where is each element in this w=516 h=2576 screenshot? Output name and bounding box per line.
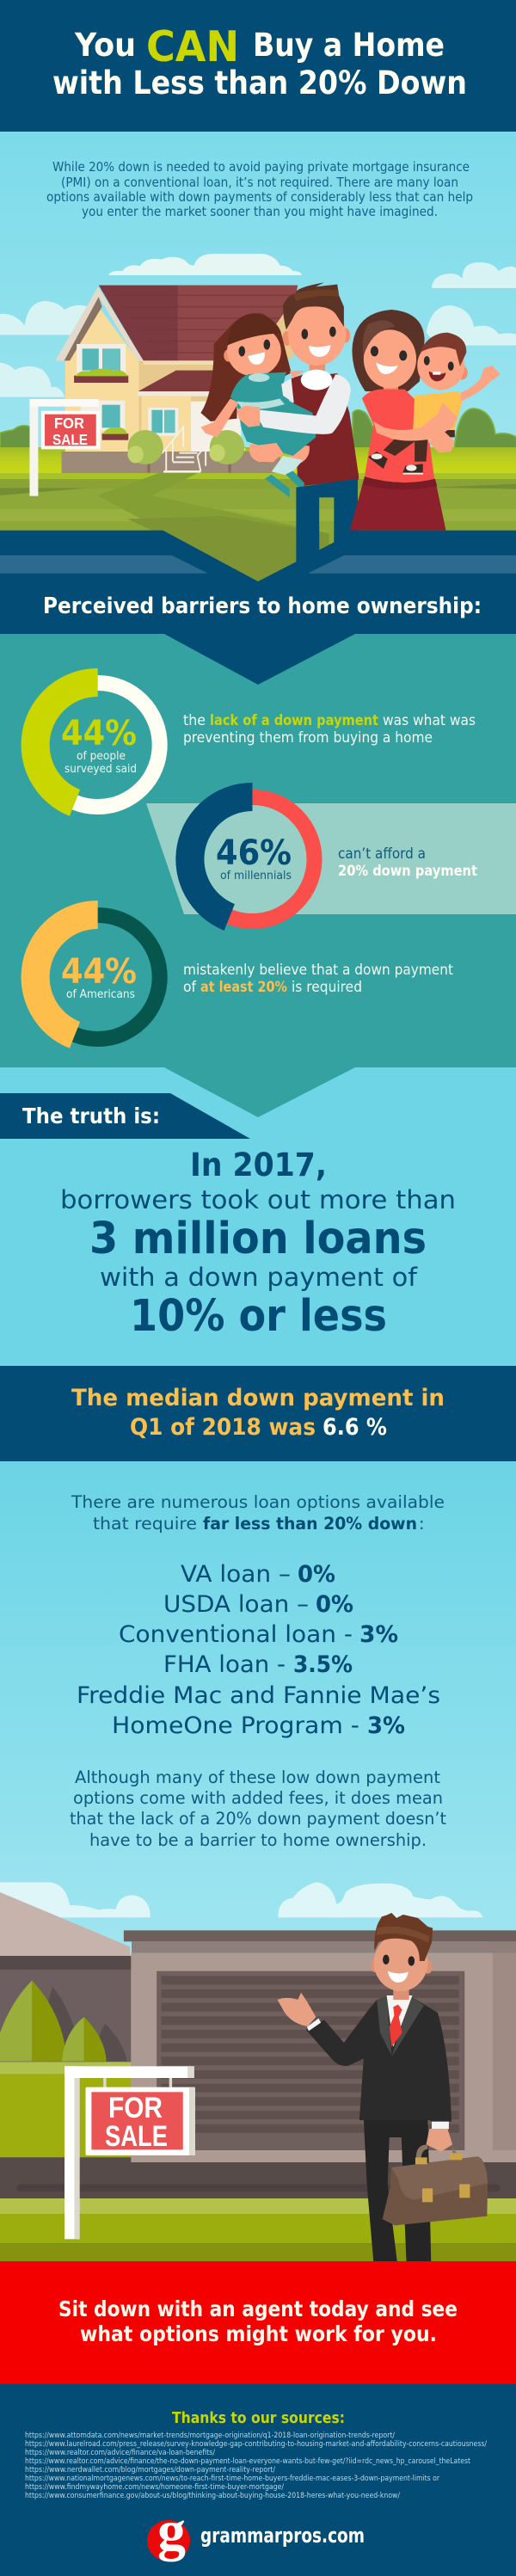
clouds [0,254,516,397]
loan list: Freddie Mac and Fannie Mae’s [77,1682,440,1709]
banner: the truth is [0,1093,250,1139]
text: mistakenly believe: mistakenly believe that a down payment [183,962,453,978]
trousers [364,2118,431,2262]
text: lack of a down payment: was what was [383,712,476,729]
daughter [200,313,316,497]
closing text: that the lack of a 20% down payment doesn’t [70,1809,446,1829]
panel: call to action [0,2261,516,2384]
source list: https://www.consumerfinance.gov/about-us/blog/thinking-about-buying-house-2018-heres-what-you-need-know/ [25,2492,400,2500]
panel: call to action: what options might work for you. [80,2321,437,2346]
intro paragraph [46,159,473,219]
teal chevron [164,1067,355,1117]
text: can't afford [338,845,477,879]
neighbouring house roof [0,1892,130,1956]
donut: 44% of Americans [22,901,160,1048]
panel: median down payment: Q1 of 2018 was [130,1414,316,1441]
loan list: Conventional loan - [119,1621,353,1648]
title: CAN [146,22,239,71]
panel: barriers [0,634,516,1067]
text: can't afford: 20% down payment [338,863,477,879]
clouds [0,1882,482,1917]
panel: call to action: Sit down with an agent today and see [58,2296,458,2321]
head [393,1984,409,2000]
text: lack of a down payment: the [183,712,206,729]
band: millennials background [146,803,516,914]
stat: 44% surveyed [61,714,137,776]
for sale sign: FOR [108,2092,163,2124]
for sale sign [29,399,101,496]
closing text: have to be a barrier to home ownership. [89,1830,427,1850]
loan list: 3% [367,1712,405,1739]
closing text: options come with added fees, it does mean [73,1788,443,1808]
source list: https://www.nerdwallet.com/blog/mortgages/down-payment-reality-report/ [25,2466,275,2475]
driveway [0,2150,516,2198]
source list [25,2432,487,2500]
heading: perceived barriers [0,585,516,634]
source list: https://www.findmywayhome.com/news/homeone-first-time-buyer-mortgage/ [25,2483,284,2492]
truth statement: 3 million loans [89,1214,427,1264]
text: can't afford: can’t afford a [338,845,426,862]
window: porch [148,408,178,436]
logo [147,2499,365,2562]
navy chevron [164,634,355,685]
panel: median down payment: 6.6 % [322,1414,387,1441]
loan list: 0% [298,1561,335,1588]
waving hand [278,1993,316,2026]
panel: median down payment: The median down payment in [71,1385,445,1411]
panel: the truth [0,1067,516,1366]
donut: 44% of people surveyed [22,668,160,816]
truth statement: In 2017, [190,1147,327,1183]
source list: https://www.realtor.com/advice/finance/va-loan-benefits/ [25,2449,215,2457]
panel: sources footer [0,2384,516,2576]
neighbouring wall [0,1956,132,2159]
source list: https://www.nationalmortgagenews.com/news/to-reach-first-time-home-buyers-freddie-mac-eases-3-down-payment-limits or [25,2475,439,2483]
text: lack of a down payment [183,712,476,746]
icon: logo g [147,2499,190,2562]
text: mistakenly believe: of [183,979,197,995]
stat: 44% Americans: 44% [61,952,137,992]
shoes [368,452,423,475]
hand and briefcase [427,2129,452,2152]
heading: perceived barriers: Perceived barriers to home ownership: [43,593,482,619]
text: mistakenly believe: at least 20% [200,979,287,995]
shrubs [127,430,244,472]
lawn [0,2198,516,2262]
text: mistakenly believe [183,962,453,995]
intro text: : [419,1514,425,1534]
loan list [77,1561,440,1739]
loan list: FHA loan - [163,1651,286,1678]
for sale sign: SALE [52,431,88,448]
text: lack of a down payment: preventing them from buying a home [183,729,433,746]
window: upper [74,344,128,383]
porch stairs [162,427,245,471]
intro paragraph: you enter the market sooner than you might have imagined. [82,204,438,219]
logo text: grammarpros.com [200,2524,365,2548]
closing text: Although many of these low down payment [75,1768,440,1787]
son [368,333,501,475]
for sale sign: SALE [105,2120,168,2153]
truth statement: with a down payment of [100,1263,418,1292]
for sale sign [64,2066,195,2239]
truth statement: borrowers took out more than [60,1185,456,1214]
loan list: 3% [359,1621,398,1648]
window: lower [81,401,128,440]
father [282,282,359,487]
garage door slats [161,1976,459,2133]
stat: 46% millennials: of millennials [220,870,292,882]
panel: hero sky background [0,132,516,536]
truth statement: 10% or less [130,1291,387,1342]
intro text: that require [93,1514,197,1534]
panel: loan options [0,1461,516,1977]
title: Buy a Home [253,27,445,64]
title [52,22,467,101]
intro paragraph: (PMI) on a conventional loan, it’s not required. There are many loan [61,175,458,190]
loan list: VA loan – [181,1561,291,1588]
intro text: far less than 20% down [203,1514,417,1534]
illustration: family in front of house [0,254,516,630]
source list: https://www.attomdata.com/news/market-trends/mortgage-origination/q1-2018-loan-origination-trends-report/ [25,2432,395,2440]
panel: median down payment [0,1366,516,1461]
truth statement [60,1147,456,1342]
garage [124,1930,516,2162]
house [55,286,298,473]
father trousers [296,479,358,566]
shrubs [0,1981,126,2062]
stat: 44% surveyed: surveyed said [64,763,137,776]
loan list: 3.5% [293,1651,353,1678]
illustration: agent and garage [0,1882,516,2262]
stat: 44% surveyed: 44% [61,714,137,753]
text: mistakenly believe: is required [292,979,362,995]
for sale sign: FOR [54,415,84,432]
hedge [0,2062,132,2157]
loan list: USDA loan – [163,1591,309,1618]
mother [350,310,445,531]
loan list: 0% [316,1591,353,1618]
stat: 46% millennials: 46% [216,833,292,873]
text: lack of a down payment: lack of a down payment [210,712,378,729]
background bushes [0,409,516,452]
agent [278,1913,488,2262]
loan list: HomeOne Program - [112,1712,359,1739]
lawn [0,447,516,582]
father arm [237,374,351,462]
intro text [71,1492,445,1534]
stat: 44% surveyed: of people [77,750,126,763]
title: with Less than 20% Down [52,65,467,101]
donut: 46% of millennials [175,783,315,931]
banner: the truth is: The truth is: [22,1104,160,1128]
navy chevron band [0,527,516,630]
heading: sources: Thanks to our sources: [172,2409,345,2427]
shirt and tie [387,1995,412,2047]
title: You [74,27,136,64]
suit [306,1997,452,2122]
stat: 44% Americans: of Americans [66,988,135,1001]
icon: logo g: g [157,2499,186,2562]
closing text [70,1768,446,1850]
panel: title header [0,0,516,132]
intro text: There are numerous loan options available [71,1492,445,1512]
source list: https://www.realtor.com/advice/finance/the-no-down-payment-loan-everyone-wants-but-few-get/?iid=rdc_news_hp_carousel_theLatest [25,2457,471,2466]
